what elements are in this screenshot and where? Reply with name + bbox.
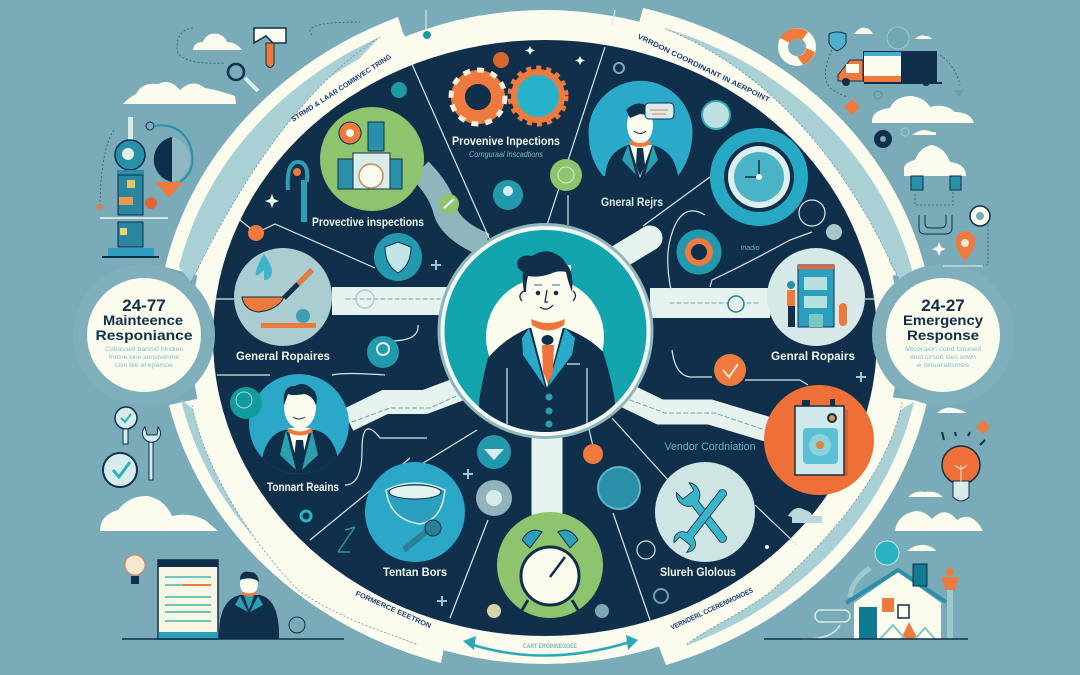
circle: appliance — [764, 385, 874, 495]
heading: general repairs top: Gneral Rejrs — [601, 195, 663, 209]
connector lines — [213, 10, 880, 620]
clipboard and person — [122, 555, 344, 639]
side circle: maintenance response: 24-77 — [122, 296, 166, 315]
dotted trails upper right — [825, 50, 988, 265]
icon: shield — [829, 32, 846, 51]
icon: check node — [714, 354, 746, 386]
small nodes upper — [391, 31, 842, 240]
icon: half pin — [146, 122, 192, 198]
heading: stretch glolous: Slureh Glolous — [660, 565, 736, 579]
icon: map pin — [932, 231, 983, 266]
label: vendor coordination: Vendor Cordniation — [664, 441, 756, 453]
sparkles in disc — [265, 46, 866, 606]
heading: preventive inspections top: Cornguraal Inscadtions — [469, 150, 543, 159]
label: inadio: Inadio — [740, 245, 760, 252]
circle: pan — [234, 248, 332, 346]
circle: inspection scene — [320, 107, 424, 211]
icon: light bulb — [942, 420, 990, 501]
side circle: emergency response: 24-27 — [921, 296, 965, 315]
icon: shield badge — [374, 233, 422, 281]
circle: man with speech bubble — [588, 81, 692, 178]
ring labels: STRMD & LAAR COMMVEC TRING — [290, 53, 394, 124]
clouds upper left — [123, 34, 242, 104]
icon: life ring — [780, 28, 815, 65]
circle: building — [767, 248, 865, 346]
bottom double arrow: CART ERGINNEGGEE — [523, 644, 577, 650]
icon: house — [764, 541, 968, 639]
ring labels: VRRDON COORDINANT IN AERPOINT — [636, 34, 771, 104]
ring labels: FORMERCE EEETRON — [354, 590, 432, 630]
clouds lower right — [895, 408, 983, 551]
side circle: emergency response: Response — [907, 327, 979, 343]
ring labels — [290, 34, 771, 632]
dotted trails upper left — [100, 22, 360, 210]
side circle: maintenance response: Mainteence — [103, 312, 183, 328]
circle: wrenches — [655, 462, 755, 562]
ring labels: VERNDERL CCERENMONOES — [670, 587, 755, 632]
circle: clock — [710, 128, 808, 226]
heading: preventive inspections top — [452, 134, 560, 159]
heading: preventive inspections left: Provective inspections — [312, 215, 424, 229]
small nodes lower — [301, 290, 744, 618]
circle: alarm clock — [497, 512, 603, 618]
decorative tower — [96, 117, 168, 258]
center person — [438, 223, 654, 440]
side circle: maintenance response: cisn ble el eparsoe — [115, 363, 174, 369]
icons right column — [874, 27, 990, 234]
icon: hook — [288, 162, 307, 222]
heading: tenant bors: Tentan Bors — [383, 565, 447, 579]
side circle: maintenance response — [73, 264, 215, 406]
icon: truck — [838, 51, 942, 86]
heading: general repairs right: Genral Ropairs — [771, 349, 855, 363]
side circle: emergency response: dnst cirson sies sown — [910, 355, 976, 361]
circle: tenant man — [230, 374, 349, 475]
side circle: emergency response: Emergency — [903, 312, 983, 328]
small cloud in disc — [788, 508, 822, 523]
icon: orange node — [248, 225, 264, 241]
side circle: emergency response — [872, 264, 1014, 406]
gears — [451, 68, 566, 124]
clouds upper right — [854, 28, 974, 176]
orange diamond — [844, 99, 860, 115]
icon: hammer — [254, 28, 286, 68]
side circle: maintenance response: Responiance — [96, 327, 193, 343]
clouds and checks lower left — [100, 407, 218, 531]
side circle: maintenance response: fnntne sine aunstvenme — [109, 355, 180, 361]
icon: gear orange — [679, 232, 719, 272]
dark central disc — [213, 40, 877, 636]
circle: funnel and wrench — [365, 462, 465, 562]
heading: tenant repairs: Tonnart Reains — [267, 480, 339, 494]
heading: preventive inspections top: Provenive Inpections — [452, 134, 560, 148]
side circle: emergency response: e onsarationes — [917, 363, 969, 369]
side circle: maintenance response: Cotiassell banmd bindies — [105, 347, 183, 353]
icon: magnifier — [228, 64, 258, 91]
connector roads — [332, 170, 770, 520]
side circle: emergency response: Mtcoraion cond bouned — [905, 347, 981, 353]
heading: general repairs left: General Ropaires — [236, 349, 330, 363]
bottom double arrow — [463, 635, 638, 656]
outer ring — [165, 8, 927, 665]
